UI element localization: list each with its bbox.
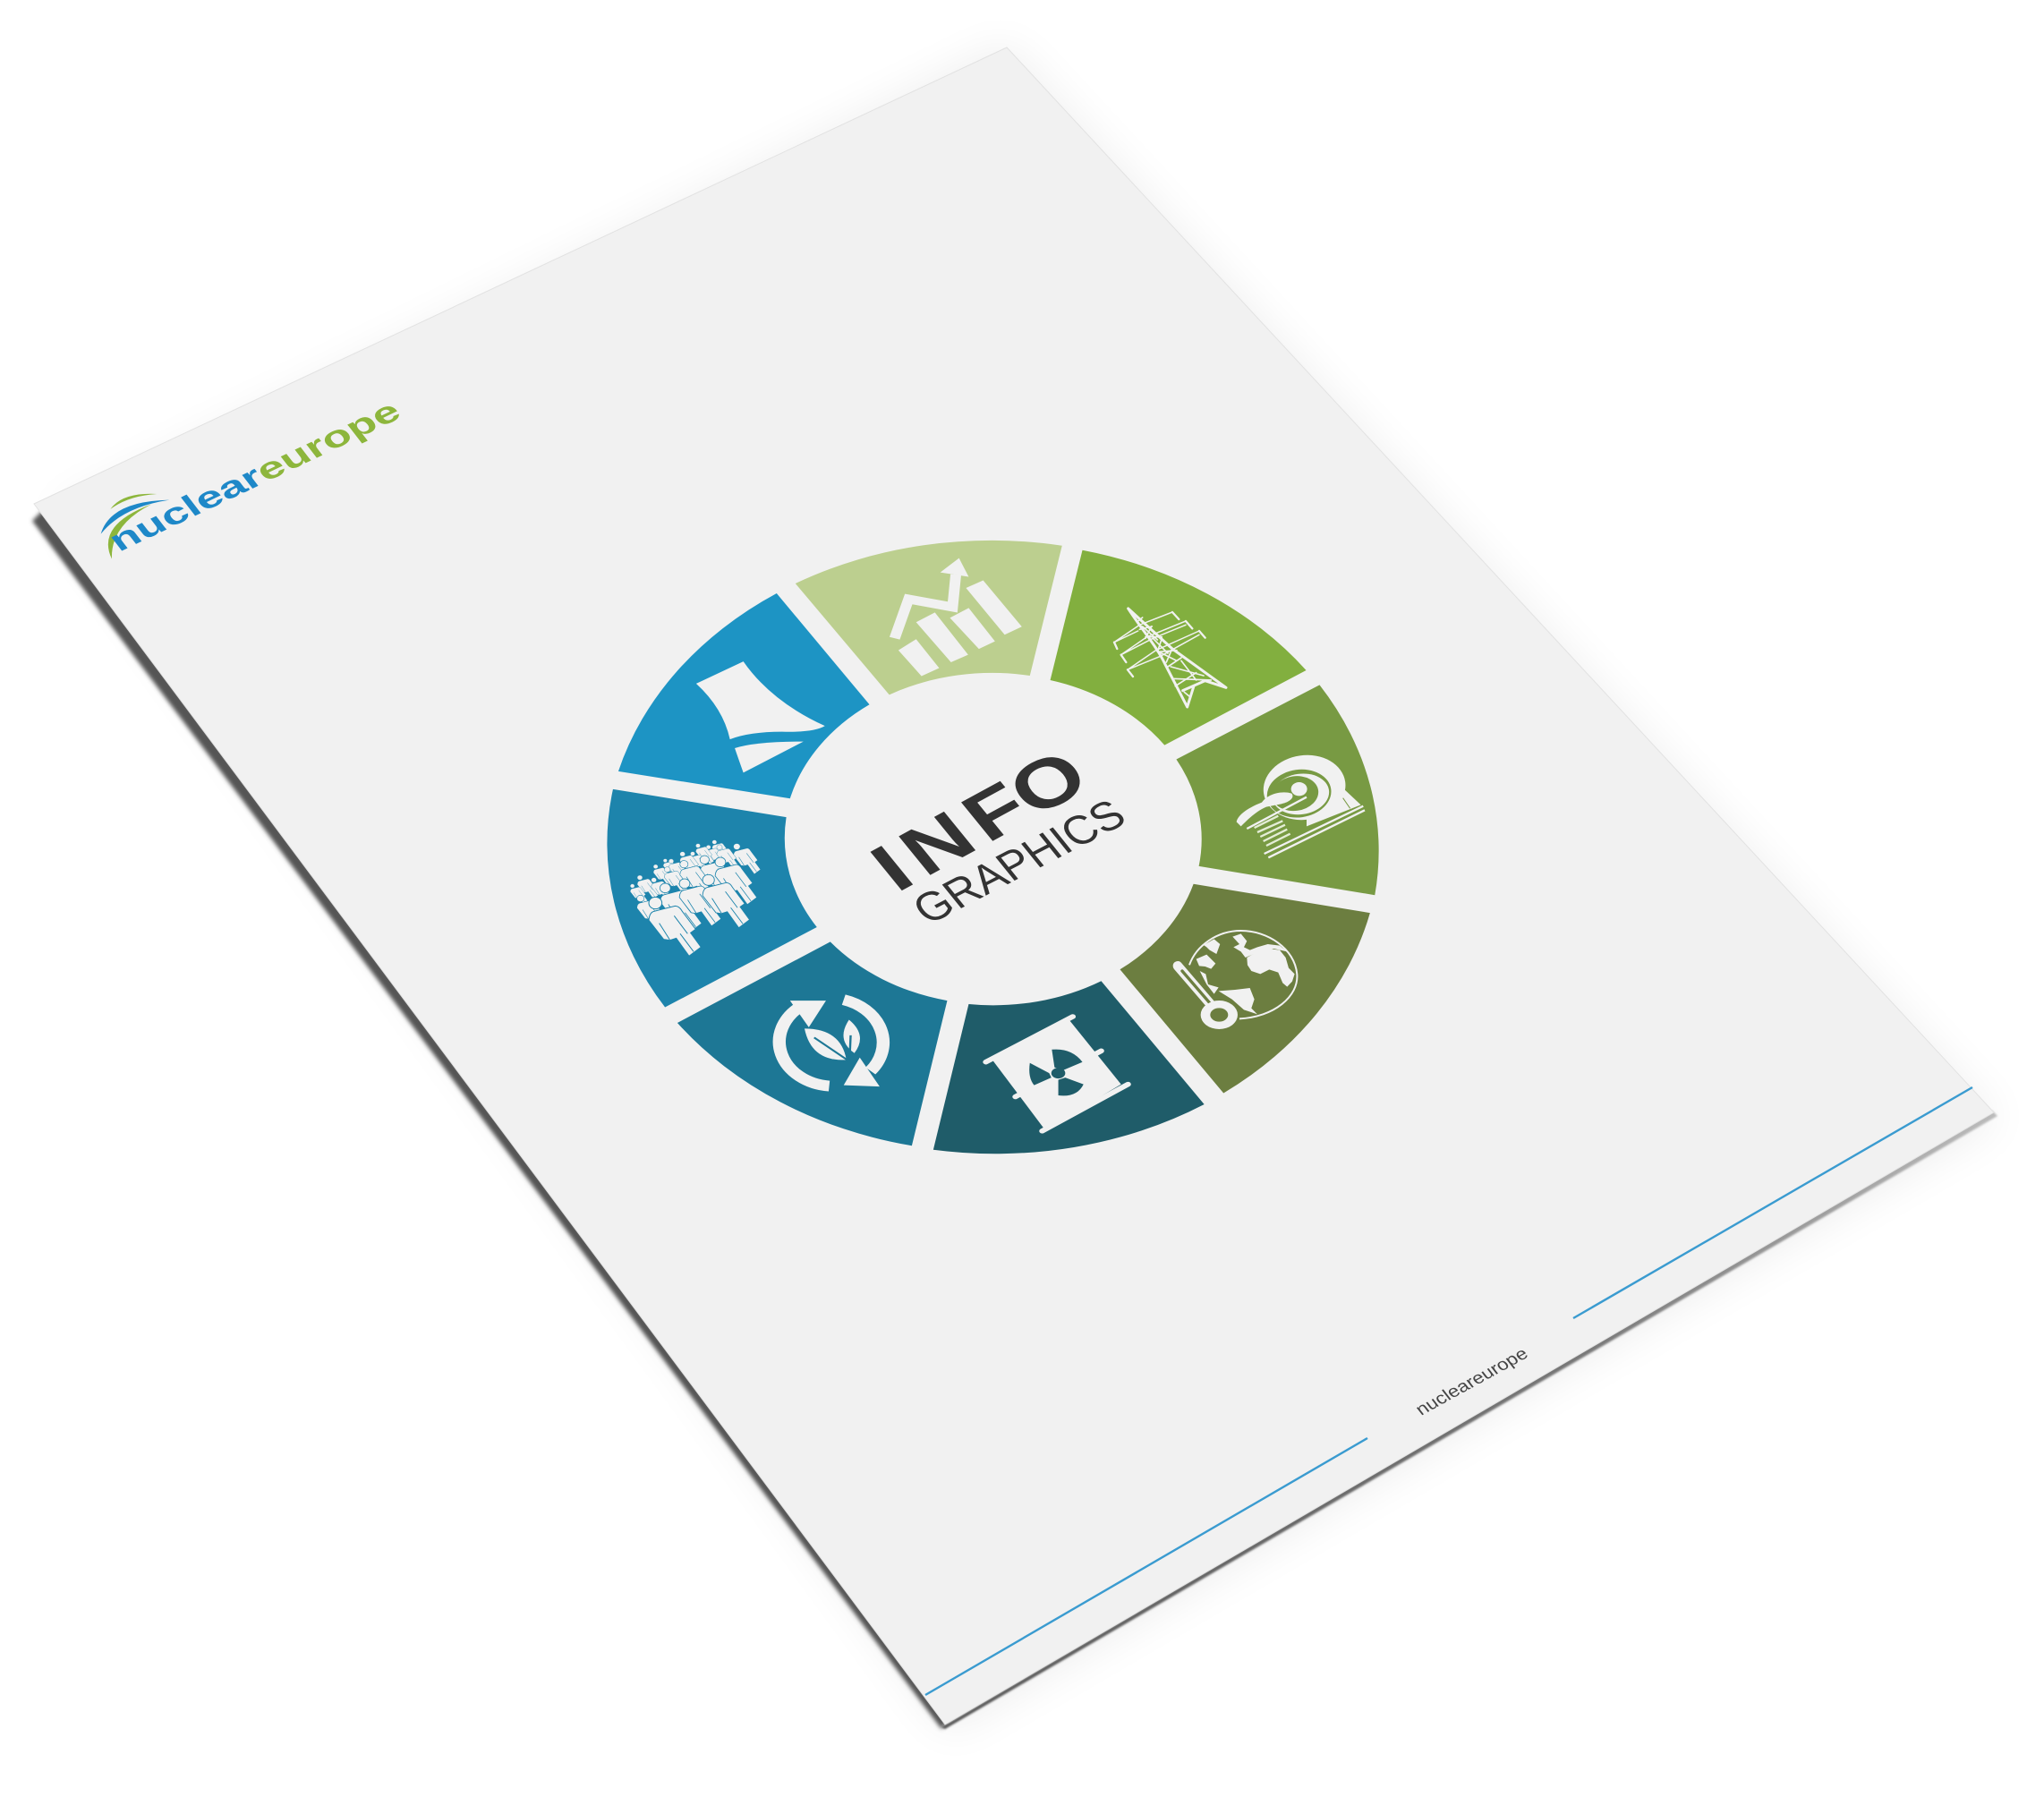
segment: medical scanner xyxy=(1176,685,1379,895)
logo swoosh: green lower arc xyxy=(108,504,151,559)
footer rule right xyxy=(1573,1087,1972,1318)
logo wordmark: nucleareurope xyxy=(102,394,408,558)
icon: rising bar chart xyxy=(895,558,1022,676)
footer label: nucleareurope xyxy=(1412,1344,1532,1419)
segment: cooling tower xyxy=(618,593,870,798)
segment: growth chart xyxy=(796,541,1062,694)
icon: radiation banner xyxy=(986,1017,1128,1131)
icon: globe with thermometer xyxy=(1178,931,1297,1029)
icon: crowd of people xyxy=(630,840,761,956)
subtitle: GRAPHICS: GRAPHICS xyxy=(904,791,1136,933)
segment: people xyxy=(607,789,817,1008)
title: INFO: INFO xyxy=(856,736,1103,906)
circular wheel with eight segments xyxy=(607,541,1379,1154)
segment: climate xyxy=(1120,884,1370,1094)
icon: pylon xyxy=(1114,609,1226,707)
icon: MRI scanner xyxy=(1237,750,1365,857)
logo swoosh: blue arc xyxy=(101,500,169,534)
logo: nucleareurope xyxy=(101,394,408,559)
hard shadow: bottom edge of sheet xyxy=(941,1111,1997,1729)
hard shadow: left edge of sheet xyxy=(32,510,947,1729)
segment: electricity pylon xyxy=(1051,550,1307,745)
logo swoosh: green top arc xyxy=(110,494,157,509)
footer rule left xyxy=(925,1438,1367,1695)
icon: recycling arrows and leaves xyxy=(779,1000,883,1086)
segment: recycling with leaves xyxy=(677,941,947,1145)
segment: radioactive waste xyxy=(933,981,1205,1154)
icon: cooling tower xyxy=(696,661,825,772)
